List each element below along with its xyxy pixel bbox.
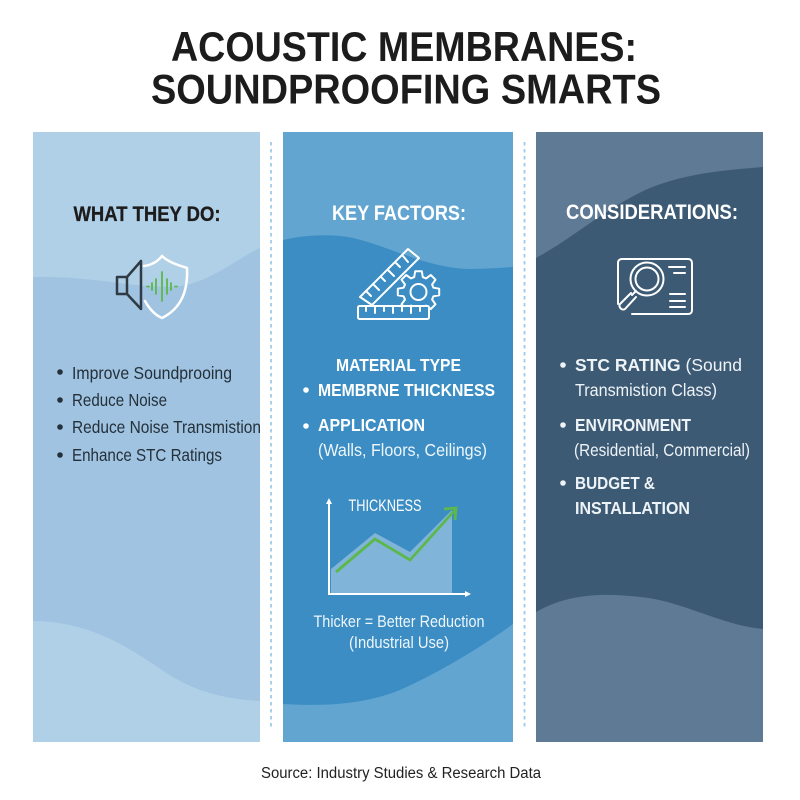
panel: considerations: [536, 132, 763, 742]
heading: what they do: WHAT THEY DO:: [74, 203, 220, 226]
title: [151, 23, 661, 112]
list: key factors: MEMBRNE THICKNESS: [318, 380, 495, 400]
icon: rulers and gear: [358, 249, 439, 319]
list: considerations: Transmistion Class): [575, 380, 717, 400]
list: considerations: (Residential, Commercial): [574, 440, 750, 460]
icon: speaker and shield: [117, 256, 187, 318]
heading: considerations: CONSIDERATIONS:: [566, 201, 738, 224]
list: what they do: Improve Soundprooing: [72, 363, 232, 383]
list: key factors: APPLICATION: [318, 415, 425, 435]
panel: key factors: [283, 132, 513, 742]
title: ACOUSTIC MEMBRANES:: [171, 23, 637, 70]
list: considerations: INSTALLATION: [575, 498, 690, 518]
caption: thickness: Thicker = Better Reduction: [314, 612, 484, 631]
icon: magnifier on card: [618, 259, 692, 314]
list: what they do: Reduce Noise Transmistion: [72, 417, 261, 437]
list: what they do: Enhance STC Ratings: [72, 445, 222, 465]
list: key factors: [303, 355, 495, 460]
title: SOUNDPROOFING SMARTS: [151, 66, 661, 112]
caption: thickness: [314, 612, 484, 652]
chart: thickness: [326, 496, 471, 597]
list: key factors: MATERIAL TYPE: [336, 355, 461, 375]
chart: thickness: THICKNESS: [348, 496, 422, 515]
source: Source: Industry Studies & Research Data: [261, 765, 541, 782]
list: considerations: ENVIRONMENT: [575, 415, 691, 435]
list: considerations: BUDGET &: [575, 473, 655, 493]
caption: thickness: (Industrial Use): [349, 633, 449, 652]
list: considerations: STC RATING (Sound: [575, 355, 742, 375]
panel: what they do: [33, 132, 261, 742]
heading: key factors: KEY FACTORS:: [332, 202, 466, 225]
list: what they do: [57, 363, 261, 465]
list: considerations: [560, 355, 750, 518]
list: what they do: Reduce Noise: [72, 390, 167, 410]
list: key factors: (Walls, Floors, Ceilings): [318, 440, 487, 460]
